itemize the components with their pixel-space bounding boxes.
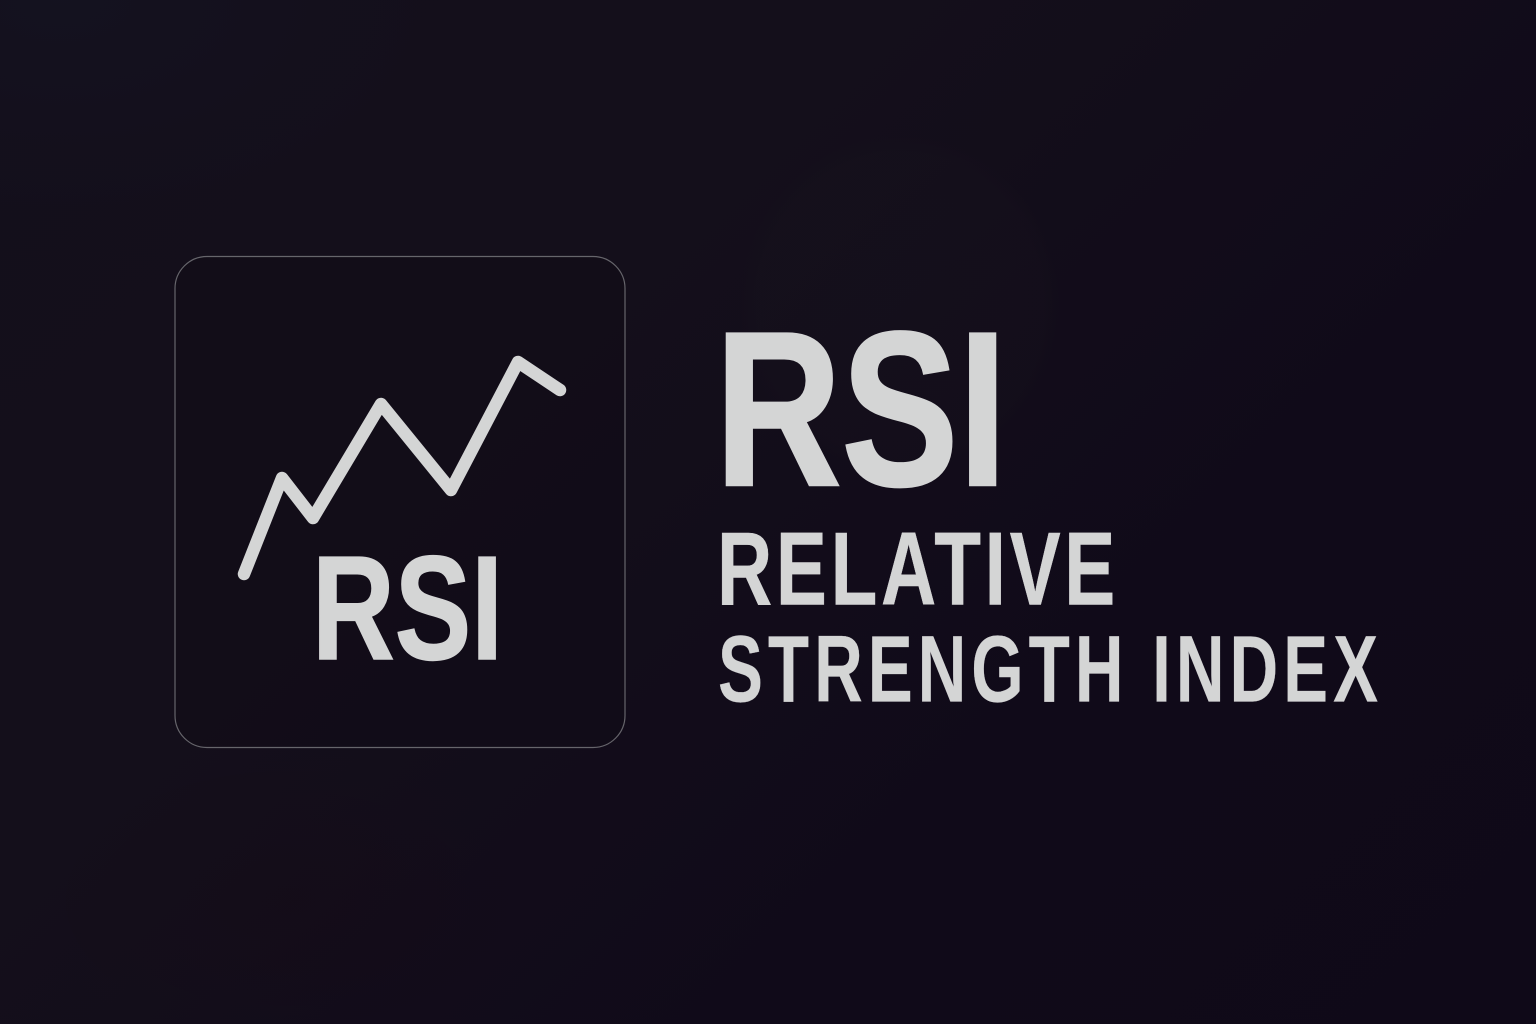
- icon: rising line chart: [244, 362, 560, 574]
- panel: RSI logo icon: [175, 256, 625, 748]
- subtitle line 1: RELATIVE: [717, 512, 1119, 628]
- title: RSI: RSI: [715, 286, 1007, 532]
- subtitle: Relative Strength Index: [717, 512, 1383, 722]
- icon label: RSI: RSI: [312, 526, 503, 691]
- icon frame: [175, 256, 625, 748]
